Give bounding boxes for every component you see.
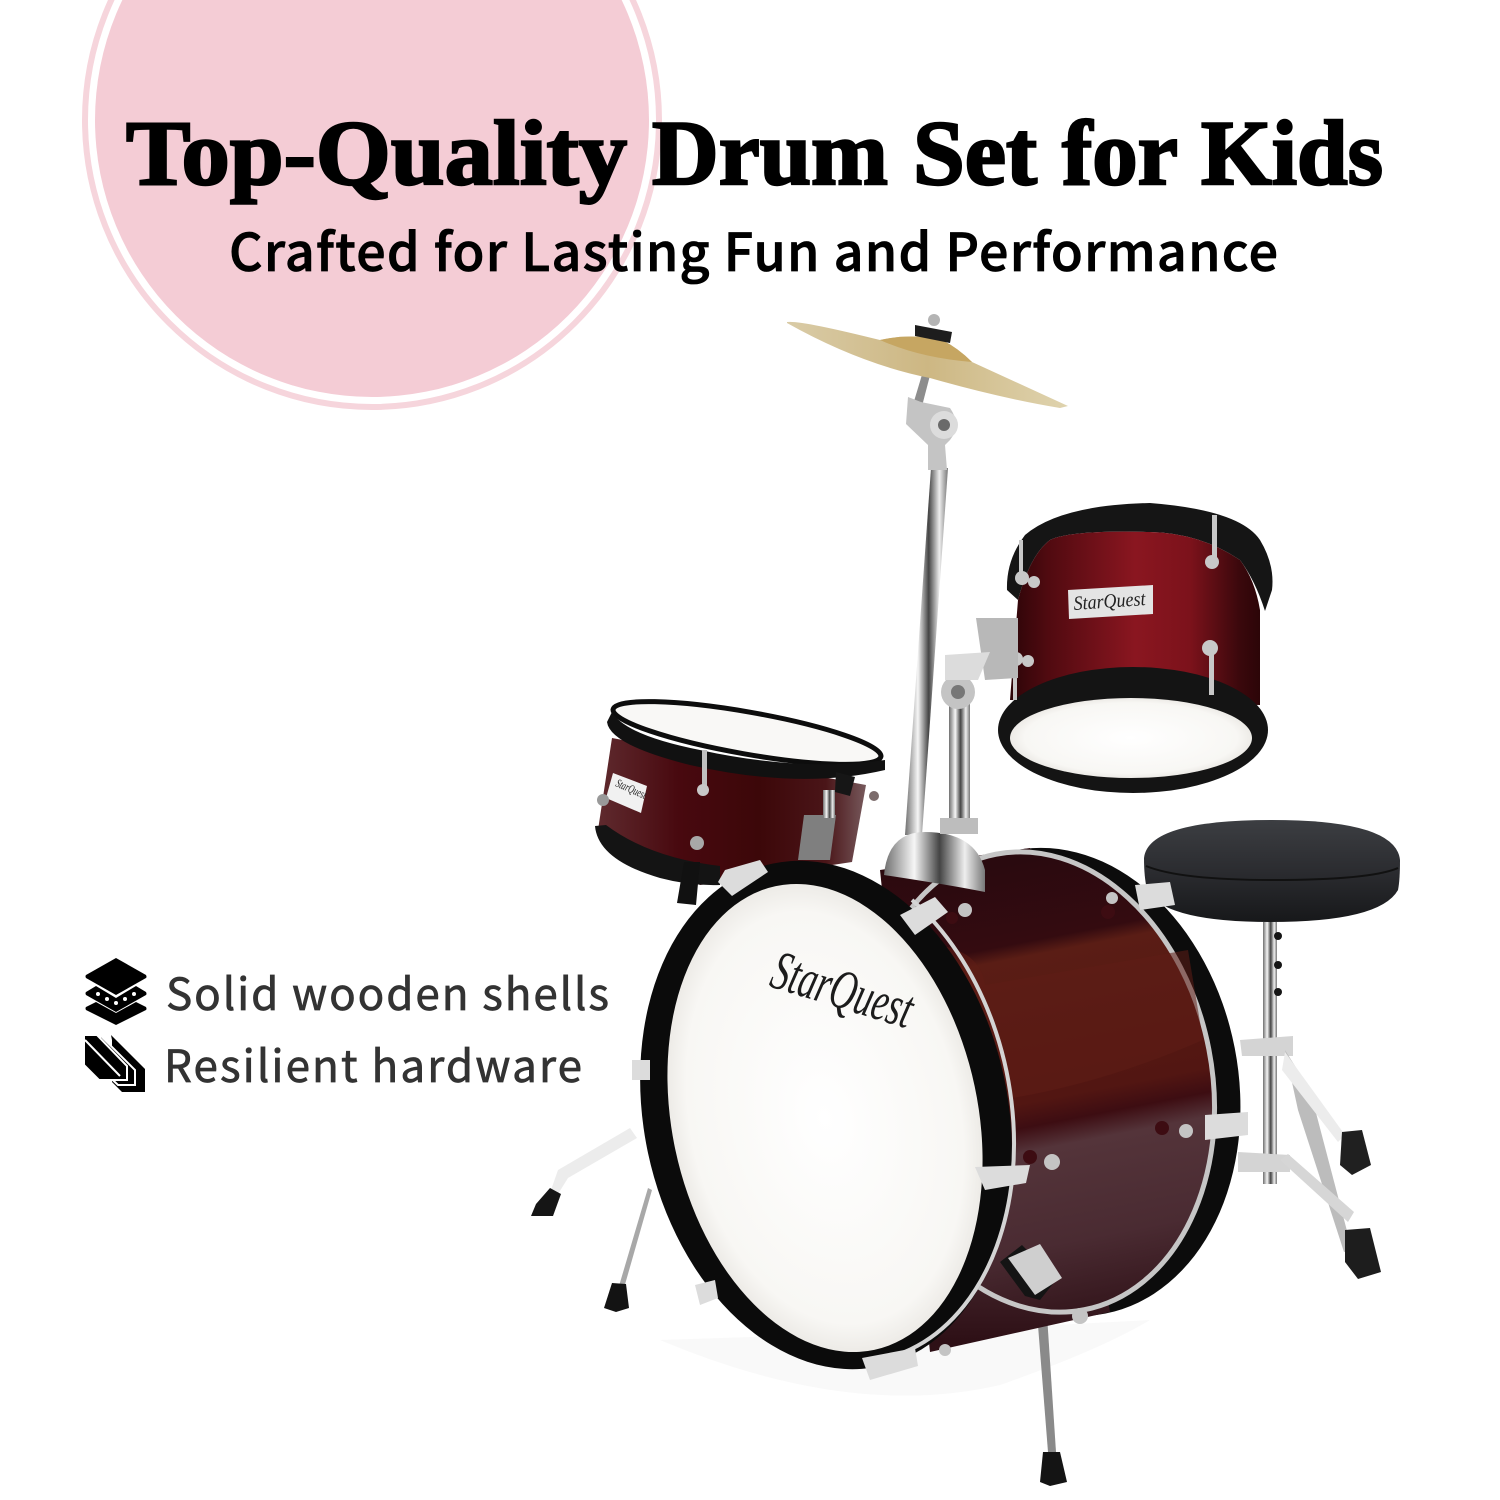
pink circle badge [85, 0, 659, 407]
front hoop [595, 826, 1057, 1404]
title: Kids [1201, 102, 1383, 204]
snare badge [606, 773, 649, 813]
subtitle: Crafted for Lasting Fun and Performance [229, 211, 1278, 286]
feature: solid wooden shells [86, 958, 609, 1025]
hanging tom [998, 503, 1272, 793]
bass drum shell [827, 816, 1280, 1352]
icon: steel angle bars [84, 1035, 145, 1092]
tom badge: StarQuest [1073, 588, 1147, 615]
icon: stacked layers [86, 958, 146, 1025]
bass drum spurs [531, 1128, 1067, 1486]
cymbal stand [905, 358, 958, 835]
floor shadow [660, 1320, 1150, 1396]
front hoop silver ring [865, 900, 1014, 1362]
title: Set [913, 102, 1037, 204]
drum logo: StarQuest [764, 939, 922, 1041]
snare badge: StarQuest [614, 776, 649, 802]
drum head [626, 854, 1024, 1382]
tom mount [884, 618, 1018, 892]
snare drum [595, 689, 885, 905]
tension lugs and claws [632, 860, 1248, 1380]
label: resilient hardware: Resilient hardware [164, 1031, 582, 1095]
drum stool [1144, 820, 1400, 1279]
drum kit [531, 314, 1400, 1486]
title: Drum [652, 102, 888, 204]
bass drum [595, 618, 1280, 1404]
feature: resilient hardware [84, 1031, 582, 1095]
spur bracket [1000, 1245, 1056, 1300]
title: Top-Quality [126, 102, 627, 204]
title [126, 102, 1383, 204]
title: for [1062, 102, 1178, 204]
label: solid wooden shells: Solid wooden shells [166, 959, 609, 1023]
cymbal [787, 314, 1068, 408]
